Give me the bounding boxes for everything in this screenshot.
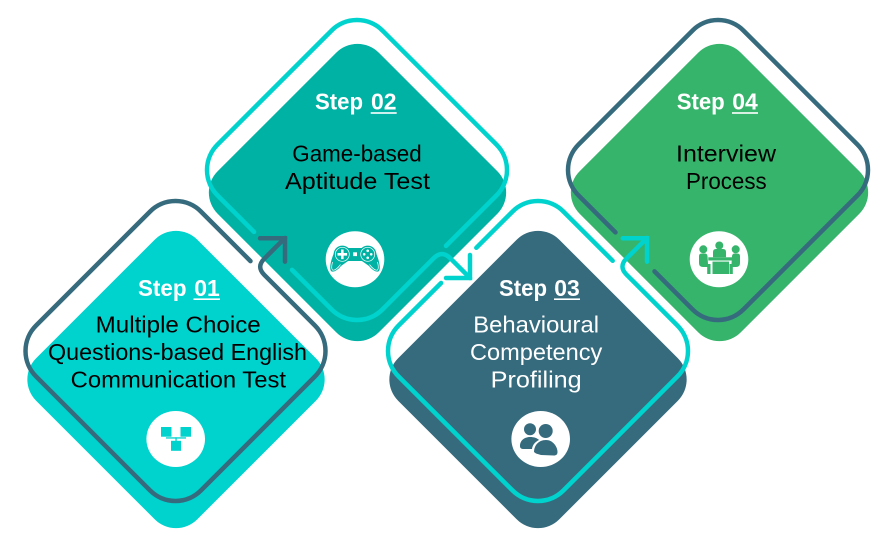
diamond: step 02 fill — [196, 31, 519, 354]
heading: step 04: 04 — [732, 88, 758, 114]
text: step 04 title: Process — [686, 168, 767, 194]
panel: step 04 interview process — [558, 20, 881, 354]
diamond: step 01 fill — [15, 218, 337, 541]
heading: step 01: 01 — [194, 275, 220, 301]
panel: step 03 behavioural competency profiling — [377, 201, 699, 541]
icon: interview meeting table — [690, 231, 748, 287]
heading: step 03 — [499, 275, 580, 301]
heading: step 04 — [677, 88, 758, 114]
heading: step 02: 02 — [371, 88, 396, 114]
text: step 02 title: Aptitude Test — [285, 168, 431, 194]
diamond: step 04 fill — [558, 31, 881, 354]
outline: step 02 cyan border with arrow — [207, 20, 507, 320]
panel: step 02 game-based aptitude test — [196, 20, 519, 354]
outline: step 04 dark border — [568, 20, 868, 320]
outline: step 01 dark border with arrow — [26, 201, 325, 501]
diamond: step 03 fill — [377, 218, 699, 541]
text: step 03 title: Profiling — [491, 366, 582, 392]
text: step 01 title: Questions-based English — [48, 339, 307, 365]
text: step 04 title — [676, 141, 777, 194]
icon: two people — [511, 411, 570, 467]
icon: hierarchy squares — [146, 411, 205, 467]
text: step 03 title: Competency — [470, 339, 603, 365]
text: step 03 title — [470, 312, 603, 392]
text: step 01 title: Multiple Choice — [96, 312, 261, 338]
icon: game controller — [326, 231, 384, 287]
panel: step 01 multiple choice test — [15, 201, 337, 541]
text: step 04 title: Interview — [676, 141, 777, 167]
heading: step 02 — [315, 88, 397, 114]
text: step 03 title: Behavioural — [473, 312, 599, 338]
heading: step 03: 03 — [554, 275, 580, 301]
heading: step 04: Step — [677, 88, 725, 114]
outline: step 03 cyan border with arrow — [388, 201, 688, 501]
text: step 01 title — [48, 312, 307, 392]
heading: step 01: Step — [138, 275, 186, 301]
heading: step 01 — [138, 275, 220, 301]
text: step 02 title — [285, 141, 431, 194]
heading: step 02: Step — [315, 88, 363, 114]
heading: step 03: Step — [499, 275, 547, 301]
text: step 01 title: Communication Test — [71, 366, 286, 392]
text: step 02 title: Game-based — [292, 141, 422, 167]
